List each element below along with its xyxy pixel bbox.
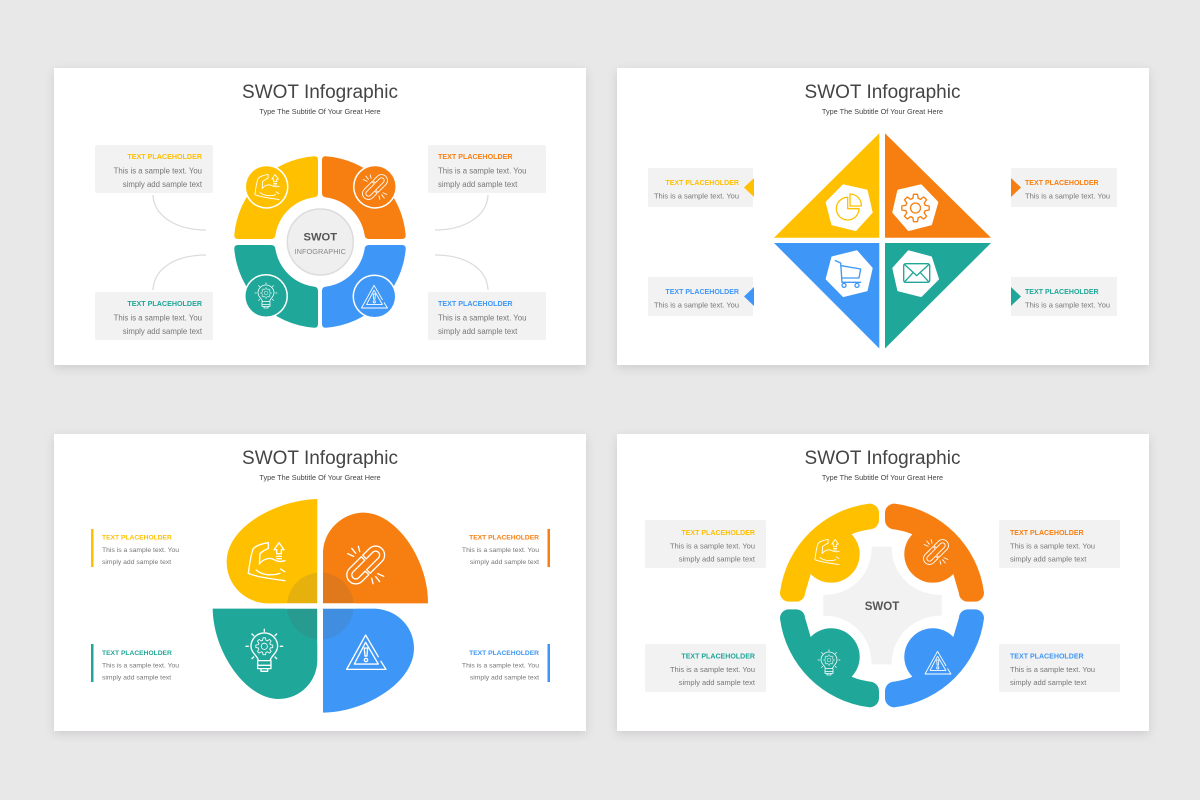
text box: bottom right: simply add sample text	[438, 327, 518, 336]
subtitle: Type The Subtitle Of Your Great Here	[259, 107, 381, 116]
center plus shape	[823, 547, 942, 664]
label: top right: This is a sample text. You	[462, 547, 539, 554]
heading: SWOT Infographic	[242, 82, 398, 103]
text box: top left: simply add sample text	[123, 180, 203, 189]
text box: top right: TEXT PLACEHOLDER	[438, 153, 513, 161]
icon: muscle	[815, 539, 839, 565]
label: bottom right: TEXT PLACEHOLDER	[469, 650, 539, 657]
icon: muscle	[255, 174, 279, 200]
text box: top right: simply add sample text	[1010, 554, 1087, 564]
text box: top left: This is a sample text. You	[670, 542, 755, 550]
subtitle: Type The Subtitle Of Your Great Here	[822, 473, 943, 482]
text box: top left: TEXT PLACEHOLDER	[127, 153, 203, 161]
icon: light bulb	[818, 650, 840, 675]
text box: bottom right	[428, 292, 546, 340]
text box: bottom left: simply add sample text	[123, 327, 203, 336]
label: bottom right	[1011, 277, 1117, 316]
petal: orange	[323, 513, 428, 603]
petal: teal	[213, 609, 317, 699]
band: blue	[885, 609, 984, 707]
label: bottom left: This is a sample text. You	[102, 662, 179, 670]
label: top right	[462, 529, 550, 567]
segment: orange weaknesses	[322, 156, 406, 239]
icon: muscle	[248, 543, 285, 581]
panel: band ring SWOT	[617, 434, 1149, 731]
label: top right: This is a sample text. You	[1025, 192, 1110, 200]
icon: gear	[902, 194, 929, 222]
heading: SWOT Infographic	[805, 82, 960, 103]
panel: diamond SWOT	[617, 68, 1149, 365]
panel: circular ring SWOT	[54, 68, 586, 365]
center label: SWOT	[865, 601, 899, 613]
label: bottom left: TEXT PLACEHOLDER	[665, 289, 739, 296]
text box: bottom left	[645, 644, 766, 692]
diamond: teal triangle	[885, 243, 991, 348]
text box: bottom right	[999, 644, 1120, 692]
label: bottom right: This is a sample text. You	[1025, 300, 1110, 310]
label: top left	[648, 168, 754, 207]
text box: bottom left: This is a sample text. You	[670, 665, 755, 674]
label: top left: This is a sample text. You	[654, 192, 739, 200]
text box: bottom left	[95, 292, 213, 340]
subtitle: Type The Subtitle Of Your Great Here	[259, 473, 381, 482]
text box: top right: simply add sample text	[438, 180, 518, 189]
text box: top left: TEXT PLACEHOLDER	[681, 530, 755, 537]
icon: pie chart	[836, 194, 861, 220]
center badge: INFOGRAPHIC	[295, 247, 347, 256]
label: bottom right: This is a sample text. You	[462, 662, 539, 670]
diamond: yellow triangle	[774, 133, 879, 238]
segment: teal opportunities	[234, 245, 318, 328]
label: bottom right: TEXT PLACEHOLDER	[1025, 289, 1099, 296]
icon: broken link	[360, 172, 390, 202]
label: top right	[1011, 168, 1117, 207]
connector curves	[153, 195, 488, 290]
label: bottom left	[648, 277, 754, 316]
label: bottom left	[91, 644, 179, 682]
icon: warning	[347, 635, 386, 669]
text box: top right: This is a sample text. You	[438, 166, 526, 176]
label: top left: TEXT PLACEHOLDER	[102, 534, 172, 542]
label: bottom left: simply add sample text	[102, 674, 171, 682]
icon: broken link	[343, 542, 388, 588]
text box: bottom left: This is a sample text. You	[114, 314, 202, 322]
band: teal	[780, 609, 879, 707]
petal: blue	[323, 609, 414, 713]
text box: top right	[999, 520, 1120, 568]
subtitle: Type The Subtitle Of Your Great Here	[822, 107, 943, 116]
petals with overlay circle	[213, 499, 428, 713]
panel: petal SWOT	[54, 434, 586, 731]
label: bottom right: simply add sample text	[470, 674, 539, 682]
icon: light bulb	[246, 629, 283, 671]
band: yellow	[780, 504, 879, 602]
text box: bottom right: simply add sample text	[1010, 678, 1087, 687]
label: bottom right	[462, 644, 550, 682]
petal: yellow	[227, 499, 317, 603]
text box: top left: simply add sample text	[679, 554, 756, 564]
heading: SWOT Infographic	[805, 448, 960, 469]
text box: bottom right: This is a sample text. You	[1010, 665, 1095, 674]
text box: top right	[428, 145, 546, 193]
label: top right: TEXT PLACEHOLDER	[1025, 180, 1099, 187]
segment: blue threats	[322, 245, 406, 328]
diamond: blue triangle	[774, 243, 879, 348]
label: top right: TEXT PLACEHOLDER	[469, 534, 539, 542]
text box: top left: This is a sample text. You	[114, 166, 202, 176]
icon: cart	[835, 261, 861, 287]
text box: bottom right: TEXT PLACEHOLDER	[1010, 654, 1084, 660]
text box: bottom right: TEXT PLACEHOLDER	[438, 300, 513, 308]
heading: SWOT Infographic	[242, 448, 398, 469]
white badges	[827, 185, 938, 296]
text box: top left	[645, 520, 766, 568]
label: top left: simply add sample text	[102, 559, 171, 566]
ring bands	[780, 504, 984, 707]
center badge: SWOT	[304, 232, 337, 244]
segment: yellow strengths	[234, 156, 318, 239]
center badge	[287, 209, 353, 275]
band: orange	[885, 504, 984, 602]
text box: bottom left: TEXT PLACEHOLDER	[681, 654, 755, 660]
text box: bottom right: This is a sample text. You	[438, 314, 526, 322]
icon: warning	[362, 285, 387, 308]
label: bottom left: TEXT PLACEHOLDER	[102, 650, 172, 657]
text box: bottom left: simply add sample text	[679, 678, 756, 687]
diamond: orange triangle	[885, 133, 991, 238]
overlay circle	[287, 573, 354, 639]
label: top left	[91, 529, 179, 567]
text box: top left	[95, 145, 213, 193]
label: top right: simply add sample text	[470, 559, 539, 566]
icon: broken link	[921, 537, 951, 567]
label: top left: TEXT PLACEHOLDER	[665, 180, 739, 187]
icon: mail	[904, 264, 930, 282]
icon: light bulb	[255, 283, 277, 308]
text box: bottom left: TEXT PLACEHOLDER	[127, 300, 203, 308]
label: bottom left: This is a sample text. You	[654, 300, 739, 310]
label: top left: This is a sample text. You	[102, 547, 179, 554]
icon: warning	[925, 651, 951, 674]
text box: top right: This is a sample text. You	[1010, 542, 1095, 550]
text box: top right: TEXT PLACEHOLDER	[1010, 530, 1084, 537]
